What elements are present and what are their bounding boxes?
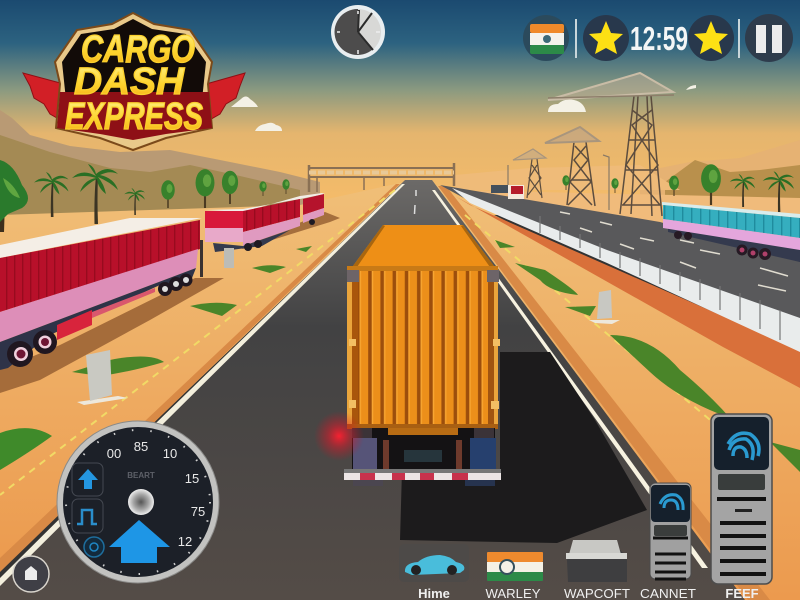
vehicle selector: jeep (564, 540, 630, 600)
large pylon (548, 73, 674, 216)
gauge numbers: 12 (178, 534, 192, 549)
top HUD (523, 14, 793, 62)
big up arrow (109, 520, 170, 563)
medium pylon (545, 127, 599, 206)
logo title (65, 28, 203, 138)
brick barrier base (455, 196, 800, 388)
gauge hub (128, 489, 154, 515)
gauge numbers (107, 439, 205, 549)
darker sand shoulders (0, 184, 770, 600)
logo badge (55, 13, 212, 150)
speedometer (57, 421, 219, 583)
red trailers far (205, 193, 340, 252)
right road edge line (432, 190, 708, 568)
timer text: 12:59 (630, 20, 688, 57)
cargo truck (314, 225, 501, 486)
logo wings (23, 73, 245, 122)
white barrier fence (452, 188, 800, 352)
accelerator pedal large (711, 414, 772, 600)
logo title: EXPRESS (65, 96, 203, 138)
pause button (745, 14, 793, 62)
left road edge line (0, 184, 405, 586)
red tail light glow (314, 411, 364, 461)
far ground strip (455, 190, 800, 240)
star button left (583, 15, 629, 61)
street lamps (508, 155, 609, 210)
big red trailer (0, 218, 224, 393)
shift button (72, 499, 103, 533)
pylons (513, 73, 674, 216)
flag button (523, 15, 569, 61)
clock icon (331, 5, 385, 59)
big left tree (0, 160, 28, 232)
game logo (23, 13, 245, 150)
sky background (0, 0, 800, 215)
logo title: DASH (74, 61, 186, 103)
truck ground shadow (400, 352, 647, 543)
teal trailer (662, 202, 800, 262)
left trees (0, 160, 290, 232)
distant mountains (0, 110, 800, 215)
gauge numbers: 15 (185, 471, 199, 486)
gauge numbers: 75 (191, 504, 205, 519)
gauge label: BEART (127, 471, 155, 480)
gantry sign (309, 163, 454, 192)
star button right (688, 15, 734, 61)
up gear button (72, 463, 103, 496)
gauge numbers: 85 (134, 439, 148, 454)
small pylon (513, 149, 546, 198)
rear bumper (344, 469, 501, 486)
accelerator pedal small (640, 483, 696, 600)
far highway (440, 185, 800, 322)
gauge numbers: 10 (163, 446, 177, 461)
right trees (562, 164, 794, 212)
container roof (350, 225, 497, 270)
road dash near truck (530, 455, 546, 487)
right sand ground (430, 182, 800, 600)
vehicle selector: car (399, 544, 469, 600)
distant truck (491, 185, 524, 199)
dashed centre line (412, 190, 416, 240)
roadside milestones (77, 248, 620, 405)
logo ribbon (57, 92, 212, 140)
chassis (352, 428, 496, 473)
yellow dashed sand lines (0, 190, 770, 495)
home button (13, 556, 49, 592)
gauge numbers: 00 (107, 446, 121, 461)
round horn button (84, 537, 104, 557)
main road surface (0, 180, 745, 600)
clouds (231, 85, 696, 131)
container rear corrugated (347, 266, 500, 429)
left sand ground (0, 182, 405, 570)
green grass patches (0, 240, 800, 472)
vehicle selector: flag (486, 552, 543, 600)
logo title: CARGO (81, 28, 195, 71)
